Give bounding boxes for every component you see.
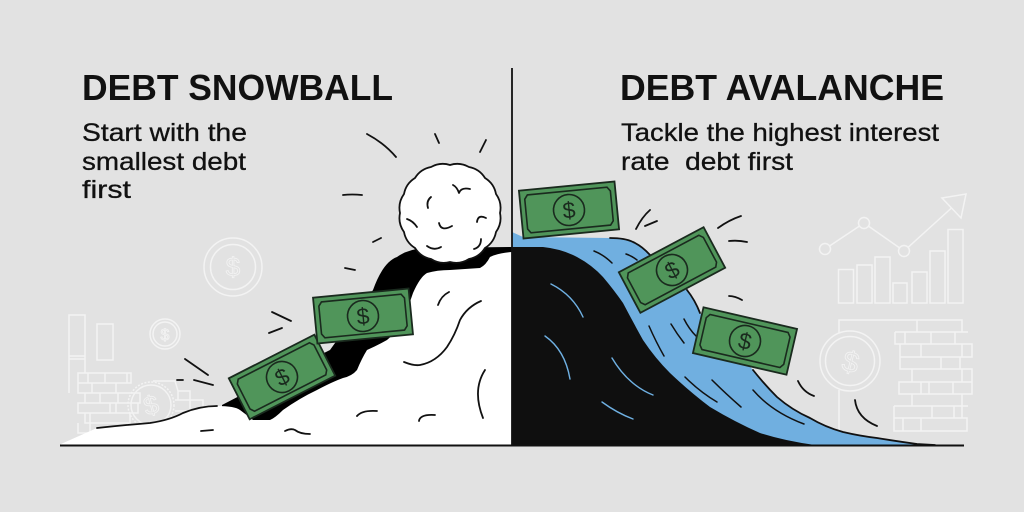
right subtitle: [621, 119, 939, 176]
snowball motion lines: [177, 134, 486, 385]
avalanche outline: [610, 238, 935, 445]
left title: DEBT SNOWBALL: [82, 67, 393, 108]
right title: DEBT AVALANCHE: [620, 67, 944, 108]
snow outline and texture: [97, 292, 485, 434]
background coin: large: $: [226, 252, 241, 282]
background coin: beaded: $: [140, 389, 162, 421]
background line art: right bricks: [839, 320, 972, 431]
bill: snowball lower: [229, 335, 335, 419]
background coin: large: [204, 238, 262, 296]
avalanche flow lines on mass: [545, 284, 653, 419]
right subtitle: rate debt first: [621, 148, 793, 176]
snowball: [399, 164, 501, 263]
bill: avalanche lower: $: [736, 327, 754, 355]
bill: avalanche middle: [619, 227, 725, 313]
background coin: small: $: [161, 327, 170, 344]
avalanche motion lines: [636, 210, 877, 426]
bill: snowball upper: [313, 289, 413, 343]
baseline: [60, 444, 964, 446]
background coin: right: [820, 331, 880, 391]
blue avalanche: [512, 232, 935, 445]
background line art: chart with arrow: [820, 194, 966, 303]
background coin: right: $: [839, 345, 862, 380]
bill: avalanche lower: [693, 307, 797, 375]
left subtitle: [82, 119, 247, 204]
right subtitle: Tackle the highest interest: [621, 119, 939, 147]
bill: avalanche top: $: [561, 196, 577, 224]
left subtitle: first: [82, 176, 131, 204]
left subtitle: Start with the: [82, 119, 247, 147]
black avalanche mass: [512, 247, 815, 445]
left subtitle: smallest debt: [82, 148, 246, 176]
bill: avalanche top: [519, 182, 619, 238]
avalanche flow lines on water: [594, 251, 804, 424]
background line art: left bars and bricks: [69, 315, 203, 433]
center divider: [511, 68, 513, 445]
background coin: small: [150, 319, 180, 349]
black hill behind snow: [222, 247, 512, 445]
bill: snowball upper: $: [355, 302, 371, 330]
white snow hill: [61, 252, 512, 445]
bill: snowball lower: $: [270, 362, 294, 391]
bill: avalanche middle: $: [660, 255, 684, 284]
background coin: beaded: [128, 382, 174, 428]
